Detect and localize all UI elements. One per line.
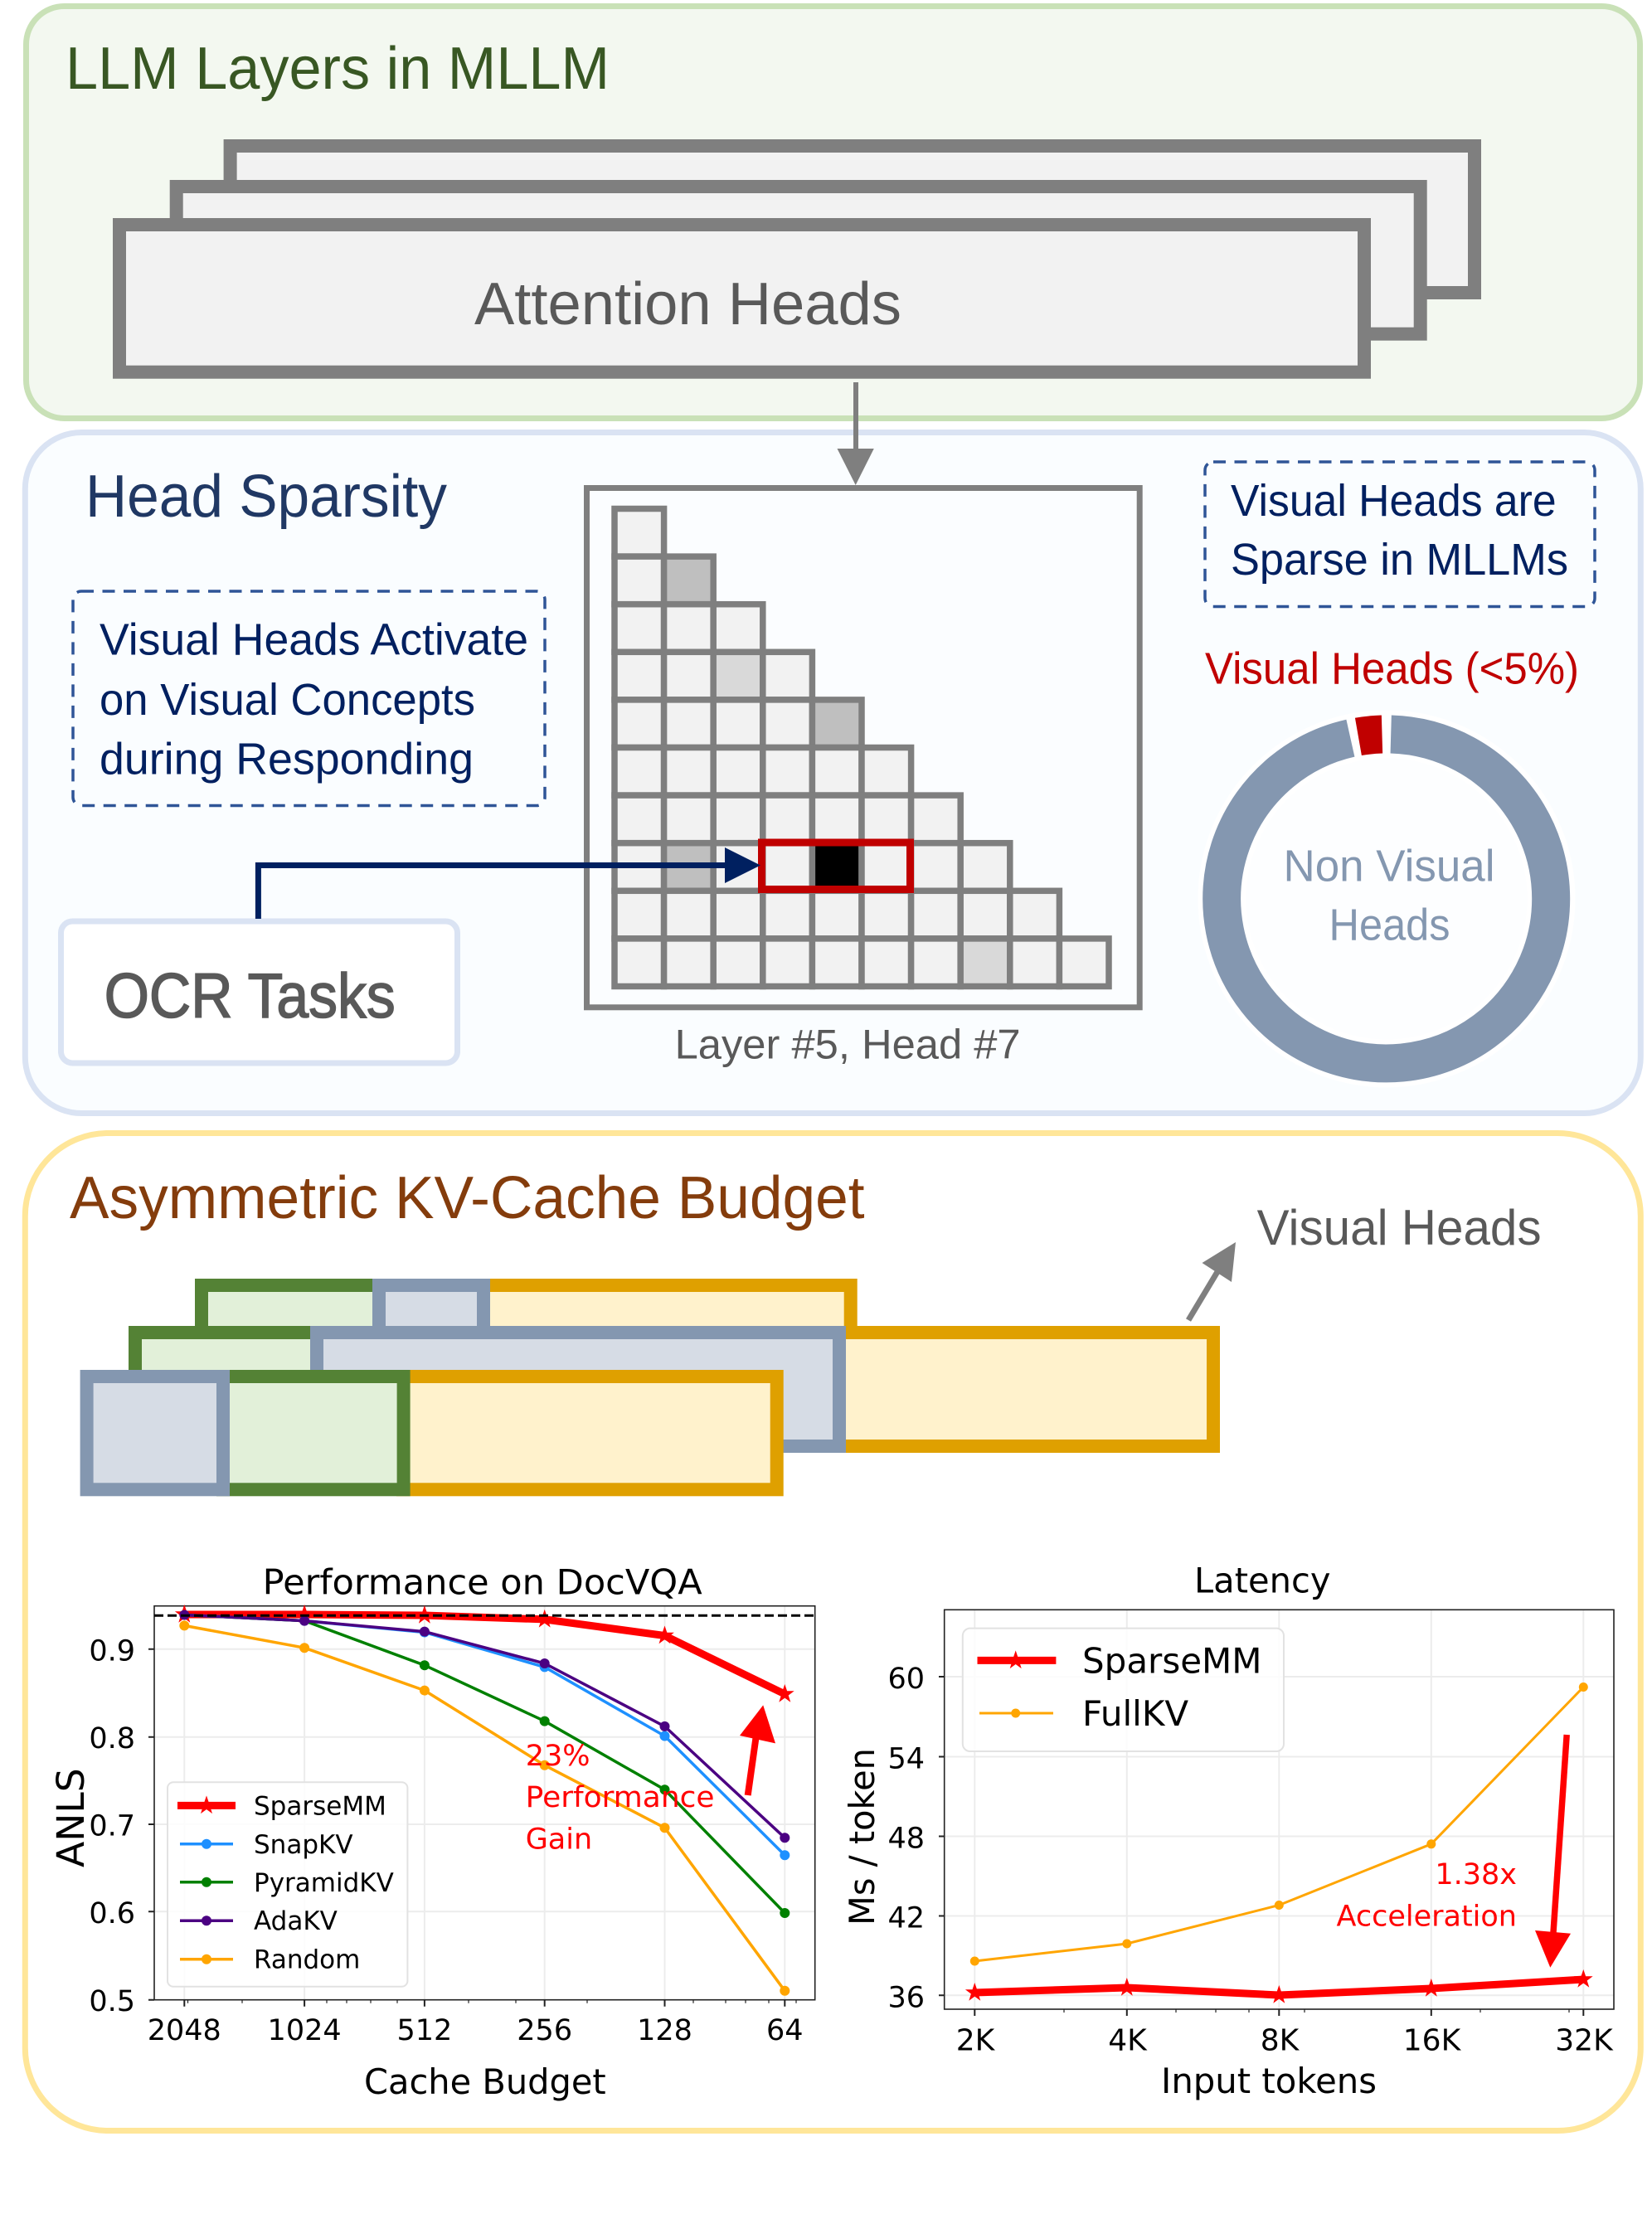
grid lines: [154, 1606, 815, 1999]
x axis tick labels: 1024: [268, 2014, 342, 2047]
series: SparseMM: [965, 1969, 1593, 2003]
donut chart: [1222, 734, 1551, 1063]
x axis tick labels: 16K: [1403, 2024, 1462, 2058]
legend: SnapKV: [254, 1830, 353, 1860]
label: visual heads: Visual Heads: [1257, 1200, 1542, 1255]
x axis tick labels: 64: [766, 2014, 804, 2047]
callout: visual heads are sparse: [1205, 462, 1595, 607]
legend: Random: [254, 1945, 360, 1975]
y axis tick labels: 60: [887, 1663, 925, 1696]
baseline dashed line: [154, 1614, 815, 1617]
y axis tick labels: [887, 1663, 925, 2015]
legend: [168, 1782, 407, 1987]
panel: head sparsity: [25, 433, 1640, 1113]
y axis tick labels: 48: [887, 1823, 925, 1856]
x axis tick labels: 512: [396, 2014, 452, 2047]
head grid frame: [587, 488, 1139, 1008]
y axis label: Ms / token: [842, 1748, 882, 1925]
callout: visual heads activate: Visual Heads Activate: [100, 615, 528, 665]
series: AdaKV: [179, 1610, 790, 1843]
cache stack: middle layer: [135, 1333, 1213, 1446]
legend: [963, 1629, 1284, 1751]
series: SnapKV: [184, 1615, 790, 1860]
y axis tick labels: 0.5: [89, 1985, 135, 2018]
y axis tick labels: 0.7: [89, 1809, 135, 1843]
x axis tick labels: 8K: [1261, 2024, 1300, 2058]
callout: visual heads are sparse: Sparse in MLLMs: [1231, 535, 1568, 585]
y axis label: ANLS: [49, 1768, 93, 1867]
x axis tick labels: 128: [637, 2014, 692, 2047]
x axis tick labels: 256: [517, 2014, 572, 2047]
arrow: to visual heads label: [1188, 1242, 1236, 1320]
chart title: Performance on DocVQA: [263, 1562, 702, 1603]
axes frame: [148, 1606, 815, 2007]
x axis label: Cache Budget: [364, 2061, 606, 2102]
y axis tick labels: 0.8: [89, 1722, 135, 1755]
callout: visual heads are sparse: Visual Heads are: [1231, 476, 1557, 526]
middle layer card: [177, 187, 1421, 334]
series: FullKV: [970, 1682, 1588, 1965]
y axis tick labels: [89, 1635, 135, 2018]
x axis tick labels: 32K: [1555, 2024, 1614, 2058]
series: SparseMM: [175, 1605, 794, 1702]
annotation: 23% performance gain: Performance: [526, 1781, 715, 1814]
annotation: 23% performance gain: [526, 1740, 715, 1857]
legend: PyramidKV: [254, 1868, 394, 1898]
x axis label: Input tokens: [1161, 2061, 1377, 2101]
front layer card: attention heads: [119, 225, 1364, 372]
heading: Asymmetric KV-Cache Budget: Asymmetric KV-Cache Budget: [70, 1165, 865, 1231]
y axis tick labels: 36: [887, 1982, 925, 2015]
callout: visual heads activate: on Visual Concepts: [100, 675, 475, 725]
line chart: latency: [842, 1560, 1614, 2101]
annotation: 1.38x acceleration: 1.38x: [1435, 1858, 1517, 1891]
annotation: 1.38x acceleration: [1337, 1858, 1517, 1934]
box: OCR Tasks: [61, 921, 458, 1063]
x axis tick labels: 2048: [148, 2014, 221, 2047]
y axis tick labels: 54: [887, 1743, 925, 1776]
highlight: selected heads in red: [761, 842, 911, 889]
annotation: 23% performance gain: Gain: [526, 1823, 592, 1857]
grid lines: [945, 1610, 1614, 2008]
annotation: 1.38x acceleration: Acceleration: [1337, 1901, 1517, 1934]
callout: visual heads activate: during Responding: [100, 735, 474, 784]
legend: FullKV: [1082, 1693, 1188, 1734]
heading: Head Sparsity: Head Sparsity: [85, 464, 447, 530]
donut label: visual heads share: Visual Heads (<5%): [1205, 644, 1579, 694]
x axis tick labels: 4K: [1108, 2024, 1148, 2058]
cache stack: front layer: [87, 1377, 777, 1489]
arrow: OCR tasks to highlighted heads: [258, 847, 760, 919]
chart title: Latency: [1194, 1560, 1330, 1600]
head grid: triangular layer by head matrix: [615, 509, 1109, 987]
y axis tick labels: 0.6: [89, 1897, 135, 1930]
box: OCR Tasks: OCR Tasks: [104, 961, 396, 1032]
legend: SparseMM: [254, 1791, 386, 1821]
x axis tick labels: [956, 2024, 1614, 2058]
back layer card: [231, 146, 1475, 293]
front layer card: attention heads: Attention Heads: [474, 271, 901, 337]
y axis tick labels: 0.9: [89, 1635, 135, 1668]
annotation: 23% performance gain: 23%: [526, 1740, 590, 1773]
cache stack: back layer: [202, 1285, 851, 1401]
line chart: performance on DocVQA: [49, 1562, 815, 2102]
heading: LLM Layers in MLLM: LLM Layers in MLLM: [66, 36, 610, 102]
series: Random: [179, 1620, 790, 1996]
callout: visual heads activate: [73, 591, 545, 806]
arrow: attention heads to head grid: [838, 382, 874, 485]
x axis tick labels: 2K: [956, 2024, 996, 2058]
arrow: acceleration: [1535, 1735, 1571, 1968]
donut chart: Heads: [1329, 901, 1450, 950]
panel: LLM layers in MLLM: [27, 7, 1640, 418]
donut chart: Non Visual: [1284, 841, 1494, 891]
legend: AdaKV: [254, 1906, 338, 1936]
axes frame: [939, 1610, 1614, 2016]
caption: layer and head: Layer #5, Head #7: [675, 1022, 1021, 1068]
x axis tick labels: [148, 2014, 804, 2047]
panel: asymmetric KV-cache budget: [25, 1133, 1640, 2131]
series: PyramidKV: [184, 1615, 790, 1918]
y axis tick labels: 42: [887, 1902, 925, 1935]
legend: SparseMM: [1082, 1640, 1262, 1681]
arrow: performance gain: [740, 1705, 775, 1795]
